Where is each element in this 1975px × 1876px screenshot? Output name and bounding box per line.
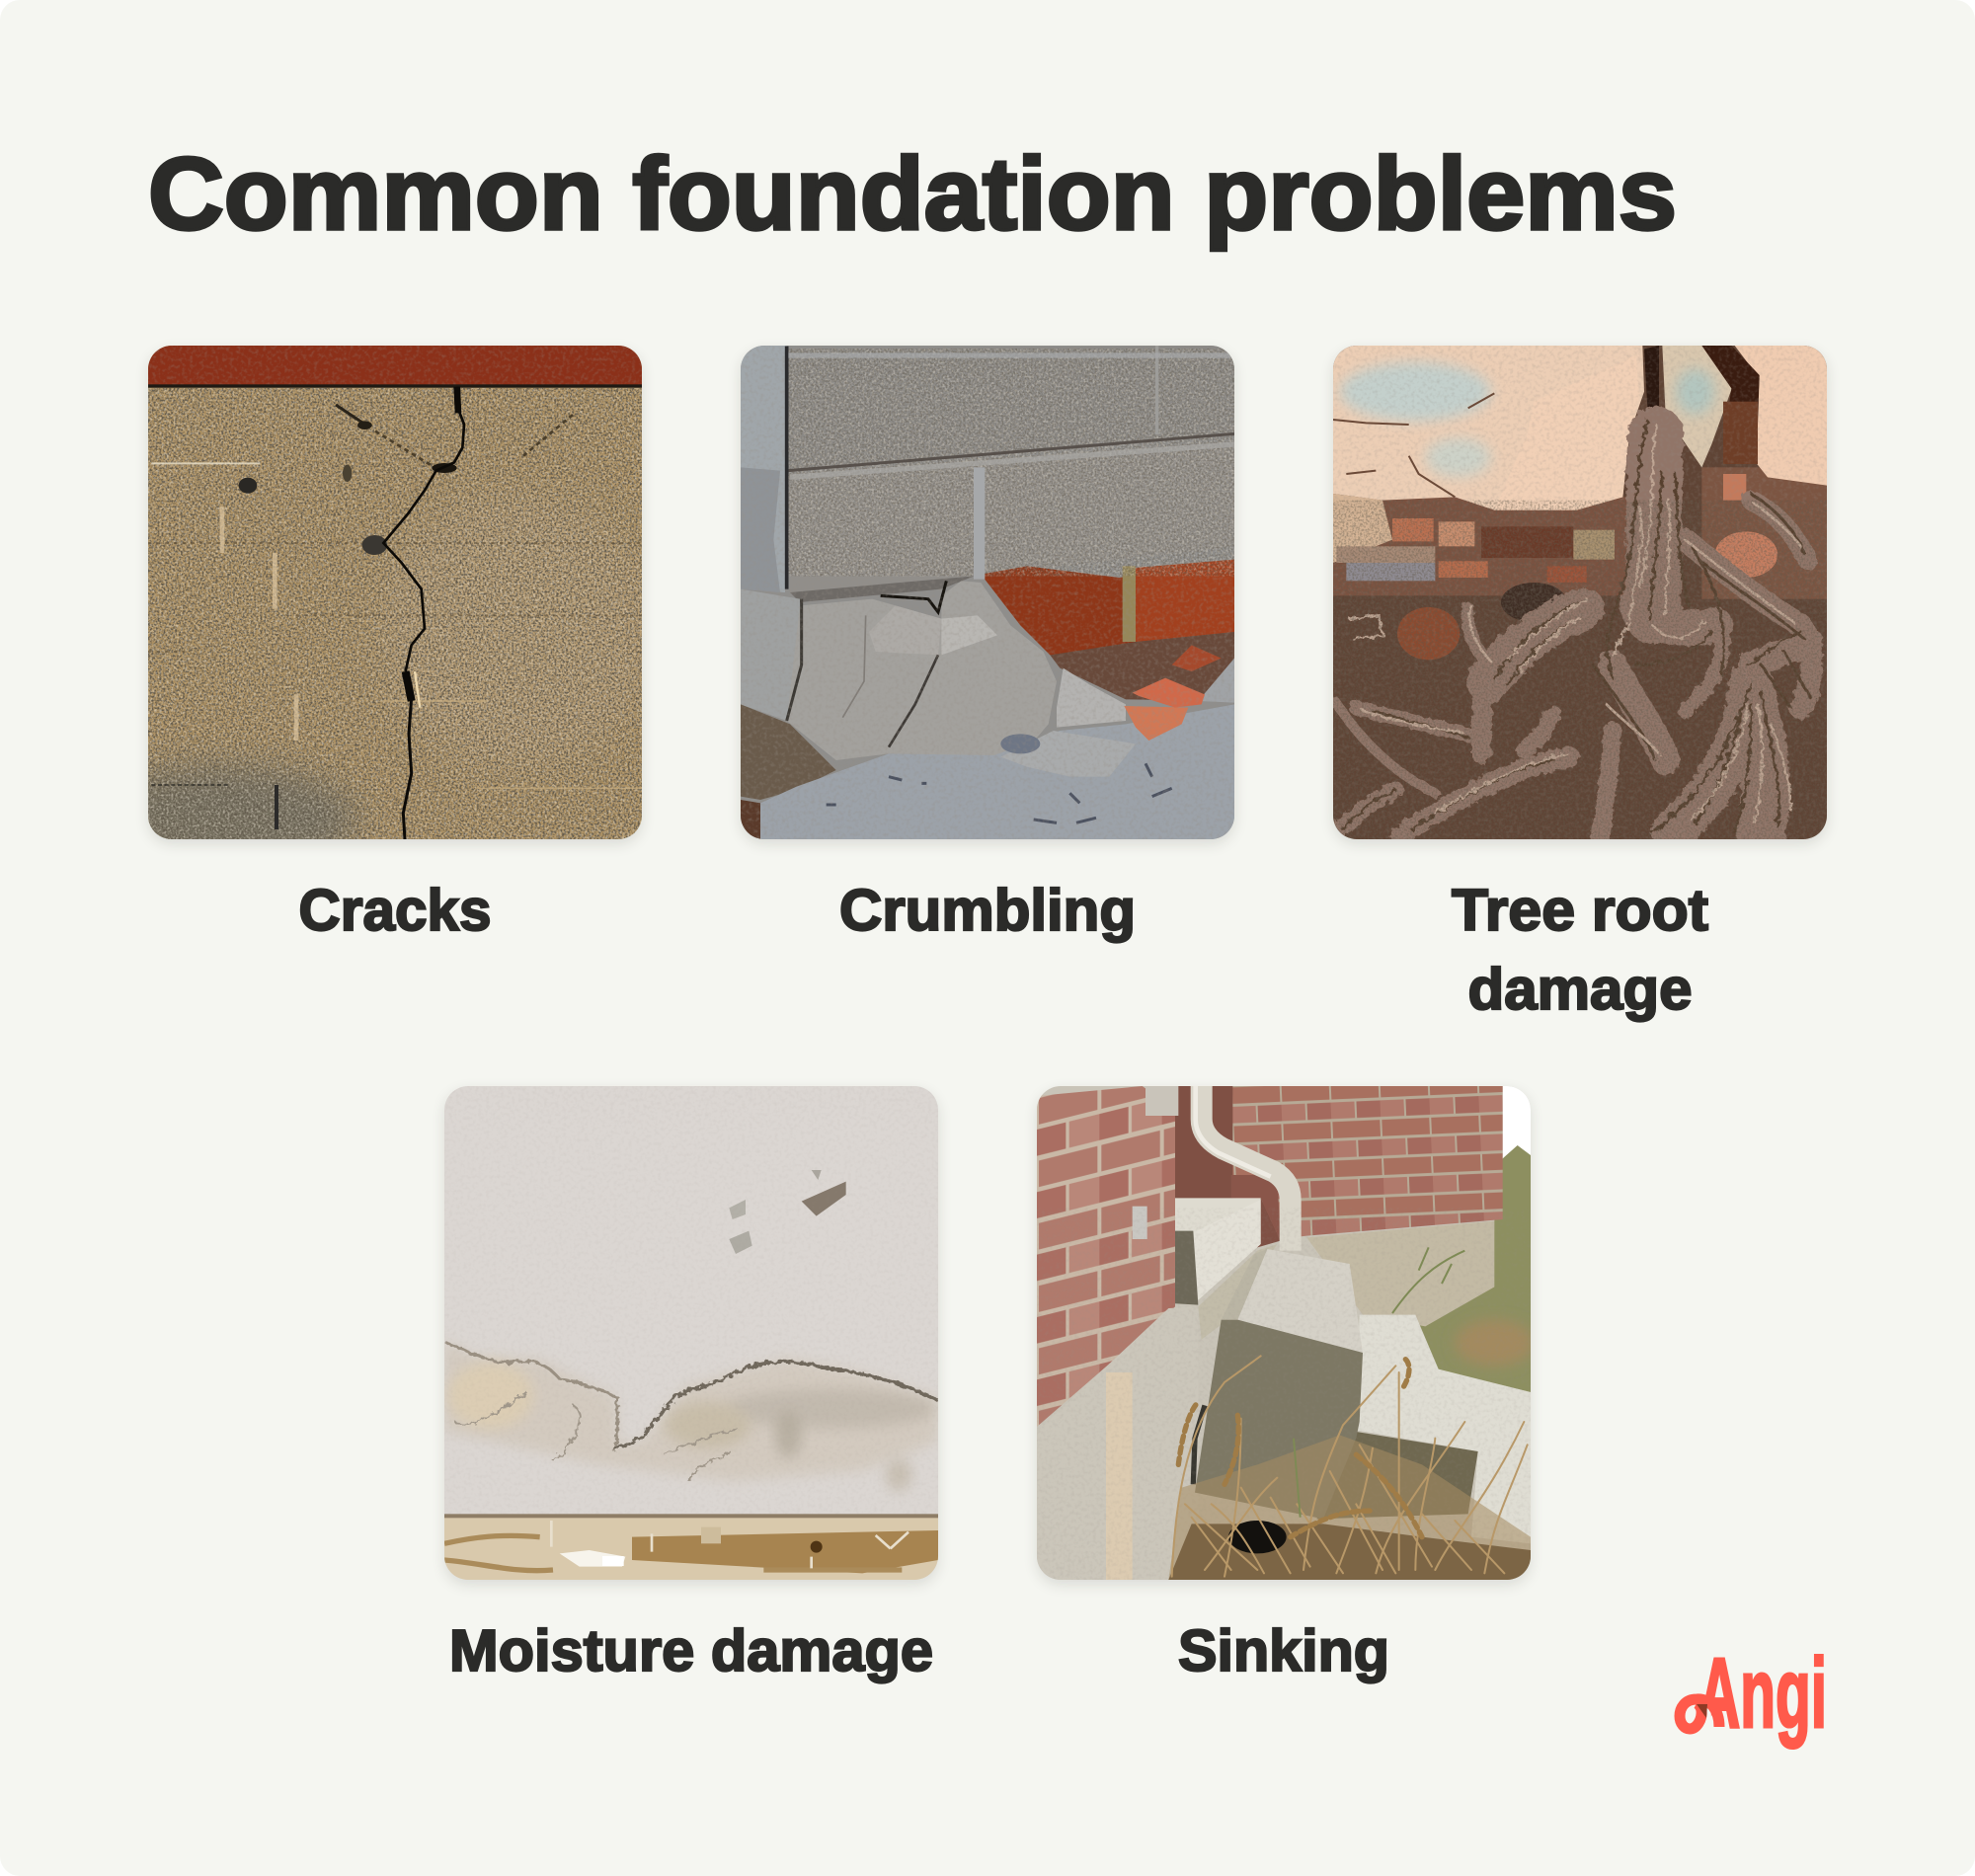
label: Tree root damage: [1452, 878, 1708, 1023]
photo: cracked concrete wall: [148, 346, 642, 839]
photo: tree roots breaking foundation: [1333, 346, 1827, 839]
panel: sinking: [1033, 1086, 1535, 1684]
label: Crumbling: Crumbling: [839, 878, 1136, 943]
title: Common foundation problems: [148, 137, 1677, 252]
panel: crumbling: [737, 346, 1238, 944]
panel: tree root damage: [1329, 346, 1831, 1023]
photo: moisture stained wall: [444, 1086, 938, 1580]
label: Sinking: Sinking: [1178, 1618, 1389, 1683]
panel: cracks: [144, 346, 646, 943]
label: Tree root damage: damage: [1467, 957, 1693, 1022]
photo: sinking concrete steps: [1037, 1086, 1531, 1580]
label: Moisture damage: Moisture damage: [449, 1618, 933, 1683]
panel: moisture damage: [440, 1086, 942, 1684]
label: Tree root damage: Tree root: [1452, 878, 1708, 943]
label: Cracks: Cracks: [298, 878, 492, 943]
photo: crumbling block and exposed brick: [741, 346, 1234, 839]
